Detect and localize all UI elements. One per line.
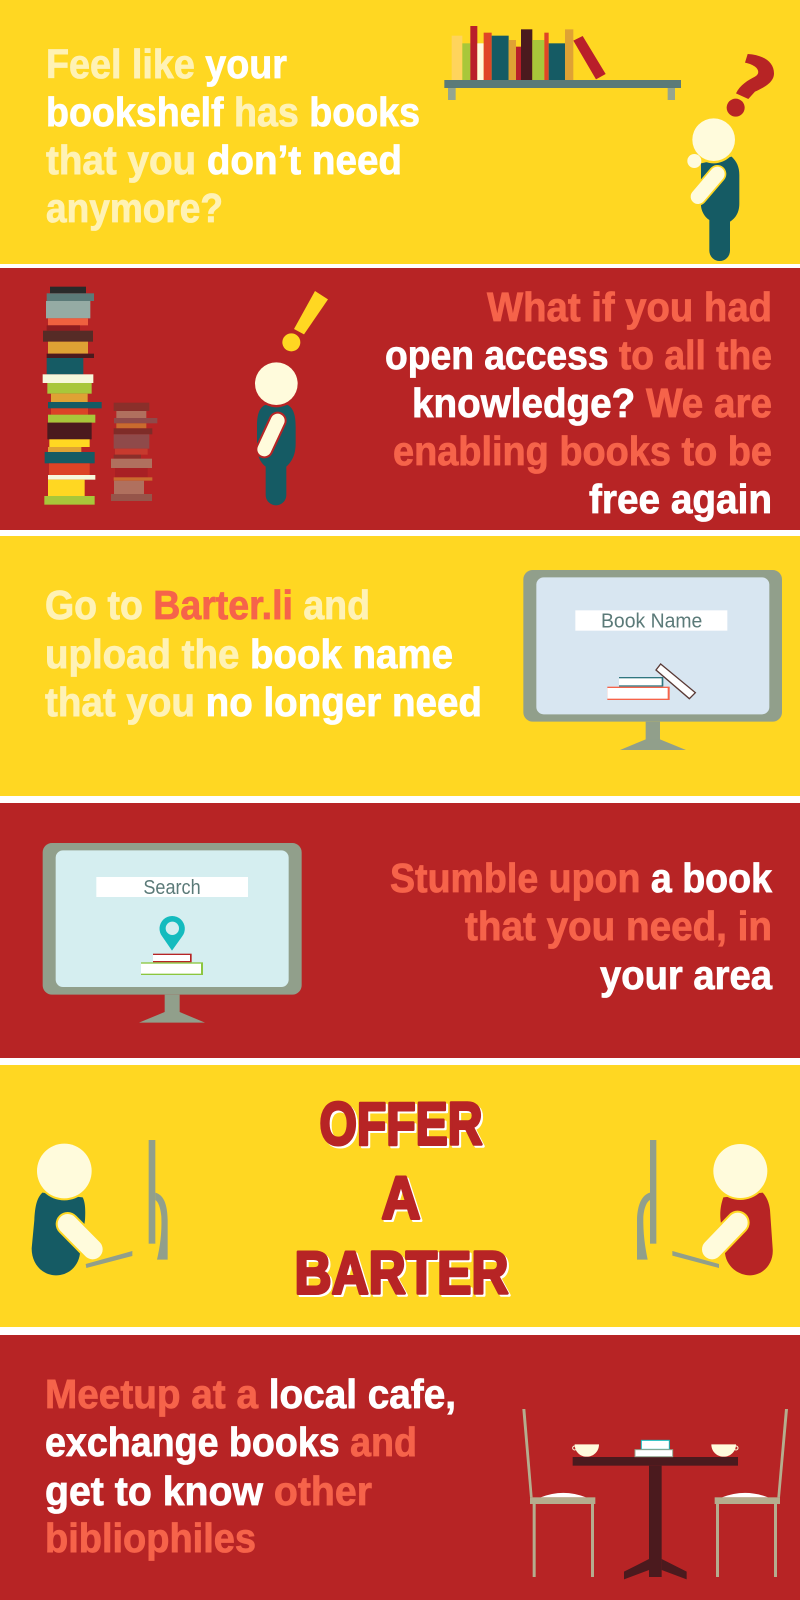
text: meetup at a local cafe: Meetup at a local cafe, (45, 1371, 456, 1417)
icon: bookshelf with books (444, 26, 681, 100)
heading: offer a barter (294, 1090, 510, 1308)
icon: red person at computer (637, 1140, 773, 1275)
icon: exclamation mark (282, 291, 328, 351)
text: go to Barter.li: that you no longer need (45, 679, 482, 725)
text: feel like your bookshelf: anymore? (46, 185, 223, 231)
icon: short faded book stack (111, 403, 157, 501)
heading: offer a barter: A (382, 1164, 420, 1232)
text: open access to knowledge: free again (589, 476, 772, 522)
text: feel like your bookshelf (46, 41, 420, 231)
icon: monitor with book name field (523, 570, 782, 750)
icon: cafe table with chairs, cups and books (522, 1409, 788, 1579)
text: go to Barter.li: Go to Barter.li and (45, 582, 370, 628)
heading: offer a barter: A (384, 1166, 422, 1234)
text: open access to knowledge (385, 284, 772, 522)
icon: question mark (727, 54, 774, 117)
text: meetup at a local cafe (45, 1371, 456, 1561)
icon: surprised person (253, 360, 300, 505)
panel: upload book name (0, 536, 800, 796)
icon: monitor with search field and pin (43, 843, 302, 1023)
text: open access to knowledge: enabling books to be (393, 428, 772, 474)
heading: offer a barter: OFFER (320, 1090, 482, 1158)
icon: thinking person (687, 116, 739, 261)
icon: teal person at computer (32, 1140, 168, 1275)
text: feel like your bookshelf: that you don’t need (46, 137, 402, 183)
text: go to Barter.li: upload the book name (45, 631, 453, 677)
text: open access to knowledge: knowledge? We are (412, 380, 772, 426)
text: stumble upon a book: that you need, in (465, 903, 772, 949)
panel: offer a barter (0, 1065, 800, 1327)
panel: bookshelf question (0, 0, 800, 264)
icon: tall book stack (43, 287, 102, 505)
heading: offer a barter: OFFER (322, 1092, 484, 1160)
panel: open access (0, 268, 800, 530)
panel: meetup at cafe (0, 1335, 800, 1600)
text: meetup at a local cafe: get to know other (45, 1468, 372, 1514)
text: feel like your bookshelf: bookshelf has books (46, 89, 420, 135)
text: open access to knowledge: What if you had (487, 284, 772, 330)
text: open access to knowledge: open access to all the (385, 332, 772, 378)
text: go to Barter.li (45, 582, 482, 725)
text: stumble upon a book: your area (600, 952, 773, 998)
icon: monitor with book name field: Book Name (601, 611, 702, 633)
text: meetup at a local cafe: exchange books and (45, 1419, 417, 1465)
text: stumble upon a book (390, 855, 773, 998)
heading: offer a barter: BARTER (296, 1242, 510, 1308)
text: meetup at a local cafe: bibliophiles (45, 1515, 256, 1561)
text: stumble upon a book: Stumble upon a book (390, 855, 772, 901)
text: feel like your bookshelf: Feel like your (46, 41, 287, 87)
panel: search nearby (0, 803, 800, 1058)
heading: offer a barter: BARTER (294, 1240, 508, 1306)
icon: monitor with search field and pin: Search (143, 877, 201, 899)
